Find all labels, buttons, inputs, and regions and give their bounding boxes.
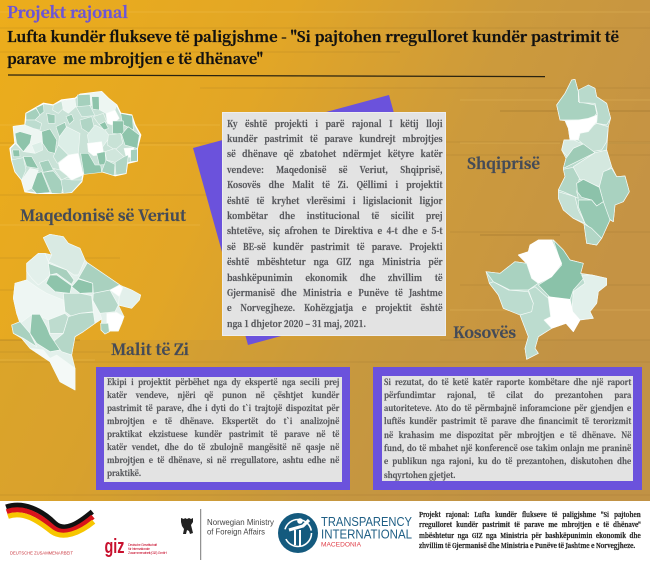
- title: Projekt rajonal and headline: Projekt rajonal: [7, 0, 128, 23]
- text: team description: pastrimit të parave, dhe i dyti do t`i trajtojë dispozitat për: [107, 402, 339, 414]
- text: team description: katër vendeve, njëri që punon në çështjet kundër: [107, 389, 339, 401]
- text: team description: praktikat ekzistuese kundër pastrimit të parave në të: [107, 428, 339, 440]
- text: project description: e Norvegjheze. Kohëzgjatja e projektit është: [227, 300, 443, 314]
- text: project description: së BE-së kundër pastrimit të parave. Projekti: [227, 239, 443, 253]
- text: results description: fund, do të mbahet një konferencë ose takim onlajn me praninë: [384, 442, 631, 454]
- text: footer description: zhvillim të Gjermanisë dhe Ministria e Punëve të Jashtme e Norvegjheze.: [418, 540, 635, 550]
- text: team description: Ekipi i projektit përbëhet nga dy ekspertë nga secili prej: [107, 376, 339, 388]
- text: project description: është të kryhet vlerësimi i ligislacionit ligjor: [227, 193, 443, 207]
- text: project description: është mbështetur nga GIZ nga Ministria për: [227, 254, 443, 268]
- title: Projekt rajonal and headline: Lufta kundër flukseve të paligjshme - "Si pajtohen rregulloret kundër pastrimit të: [7, 26, 619, 47]
- logo: giz: [104, 536, 167, 558]
- panel: team: [96, 367, 350, 490]
- text: project description: Ky është projekti i parë rajonal I këtij lloji: [227, 116, 443, 130]
- text: footer description: mbështetur nga GIZ nga Ministria për bashkëpunimin ekonomik dhe: [418, 530, 640, 540]
- text: project description: bashkëpunimin ekonomik dhe zhvillim të: [227, 270, 443, 284]
- text: project description: kombëtar dhe institucional të sicilit prej: [227, 208, 443, 222]
- text: footer description: Projekt rajonal: Lufta kundër flukseve të paligjshme "Si pajtohen: [418, 509, 640, 519]
- text: project description: shtetëve, siç afrohen te Direktiva e 4-t dhe e 5-t: [227, 223, 443, 237]
- text: team description: praktikë.: [107, 467, 141, 479]
- text: project description: nga 1 dhjetor 2020 – 31 maj, 2021.: [227, 316, 366, 330]
- title: Projekt rajonal and headline: parave me mbrojtjen e të dhënave": [7, 48, 263, 69]
- text: footer description: [418, 509, 641, 550]
- logo: Transparency International Macedonia: INTERNATIONAL: [321, 528, 412, 542]
- logo: Norwegian Ministry of Foreign Affairs: Norwegian Ministry: [207, 517, 275, 527]
- text: results description: luftës kundër pastrimit të parave dhe financimit të terorizmit: [384, 415, 631, 427]
- logo: giz: Zusammenarbeit (GIZ) GmbH: [128, 551, 167, 555]
- logo: Transparency International Macedonia: TRANSPARENCY: [321, 515, 413, 529]
- label: Shqiprisë: Shqiprisë: [467, 152, 540, 174]
- logo: Deutsche Zusammenarbeit flag: [5, 502, 96, 556]
- logo: giz: für Internationale: [128, 547, 150, 551]
- text: team description: [104, 377, 342, 482]
- text: results description: në krahasim me dispozitat për mbrojtjen e të dhënave. Në: [384, 429, 631, 441]
- text: team description: katër vendet, dhe do të zbulojnë mangësitë në qasje në: [107, 441, 339, 453]
- logo: Norwegian Ministry of Foreign Affairs: [181, 509, 275, 560]
- text: project description: Kosovës dhe Malit të Zi. Qëllimi i projektit: [227, 177, 443, 191]
- text: results description: e publikun nga rajoni, ku do të prezantohen, diskutohen dhe: [384, 455, 631, 467]
- logo: Norwegian Ministry of Foreign Affairs: of Foreign Affairs: [207, 526, 265, 536]
- panel: results: [373, 367, 642, 490]
- text: footer description: rregulloret kundër pastrimit të parave me mbrojtjen e të dhënave": [418, 519, 640, 529]
- text: results description: shqyrtohen gjetjet.: [384, 469, 456, 481]
- label: Malit të Zi: Malit të Zi: [111, 338, 189, 360]
- logo: Transparency International Macedonia: [278, 513, 413, 553]
- text: team description: mbrojtjen e të dhënave, si në rregullatore, ashtu edhe në: [107, 454, 339, 466]
- text: project description: kundër pastrimit të parave kundrejt mbrojtjes: [227, 131, 443, 145]
- text: project description: së dhënave që zbatohet ndërmjet këtyre katër: [227, 146, 443, 160]
- logo: Transparency International Macedonia: MACEDONIA: [321, 542, 361, 548]
- text: team description: mbrojtjen e të dhënave. Ekspertët do t`i analizojnë: [107, 415, 339, 427]
- title: Projekt rajonal and headline: [7, 0, 619, 78]
- panel: project description: [222, 112, 446, 336]
- text: results description: përfundimtar rajonal, të cilat do prezantohen para: [384, 389, 631, 401]
- label: Kosovës: Kosovës: [453, 321, 516, 343]
- text: results description: autoriteteve. Ato do të përmbajnë inforamcione për gjendjen e: [384, 402, 631, 414]
- text: project description: Gjermanisë dhe Ministria e Punëve të Jashtme: [227, 285, 443, 299]
- label: Maqedonisë së Veriut: Maqedonisë së Veriut: [20, 204, 187, 226]
- text: results description: [382, 376, 633, 481]
- text: project description: vendeve: Maqedonisë së Veriut, Shqiprisë,: [227, 162, 443, 176]
- logo: giz: giz: [104, 536, 124, 558]
- text: results description: Si rezutat, do të ketë katër raporte kombëtare dhe një raport: [384, 376, 631, 388]
- logo: Deutsche Zusammenarbeit flag: DEUTSCHE ZUSAMMENARBEIT: [10, 550, 73, 556]
- logo: giz: Deutsche Gesellschaft: [128, 543, 157, 547]
- text: project description: [226, 116, 443, 330]
